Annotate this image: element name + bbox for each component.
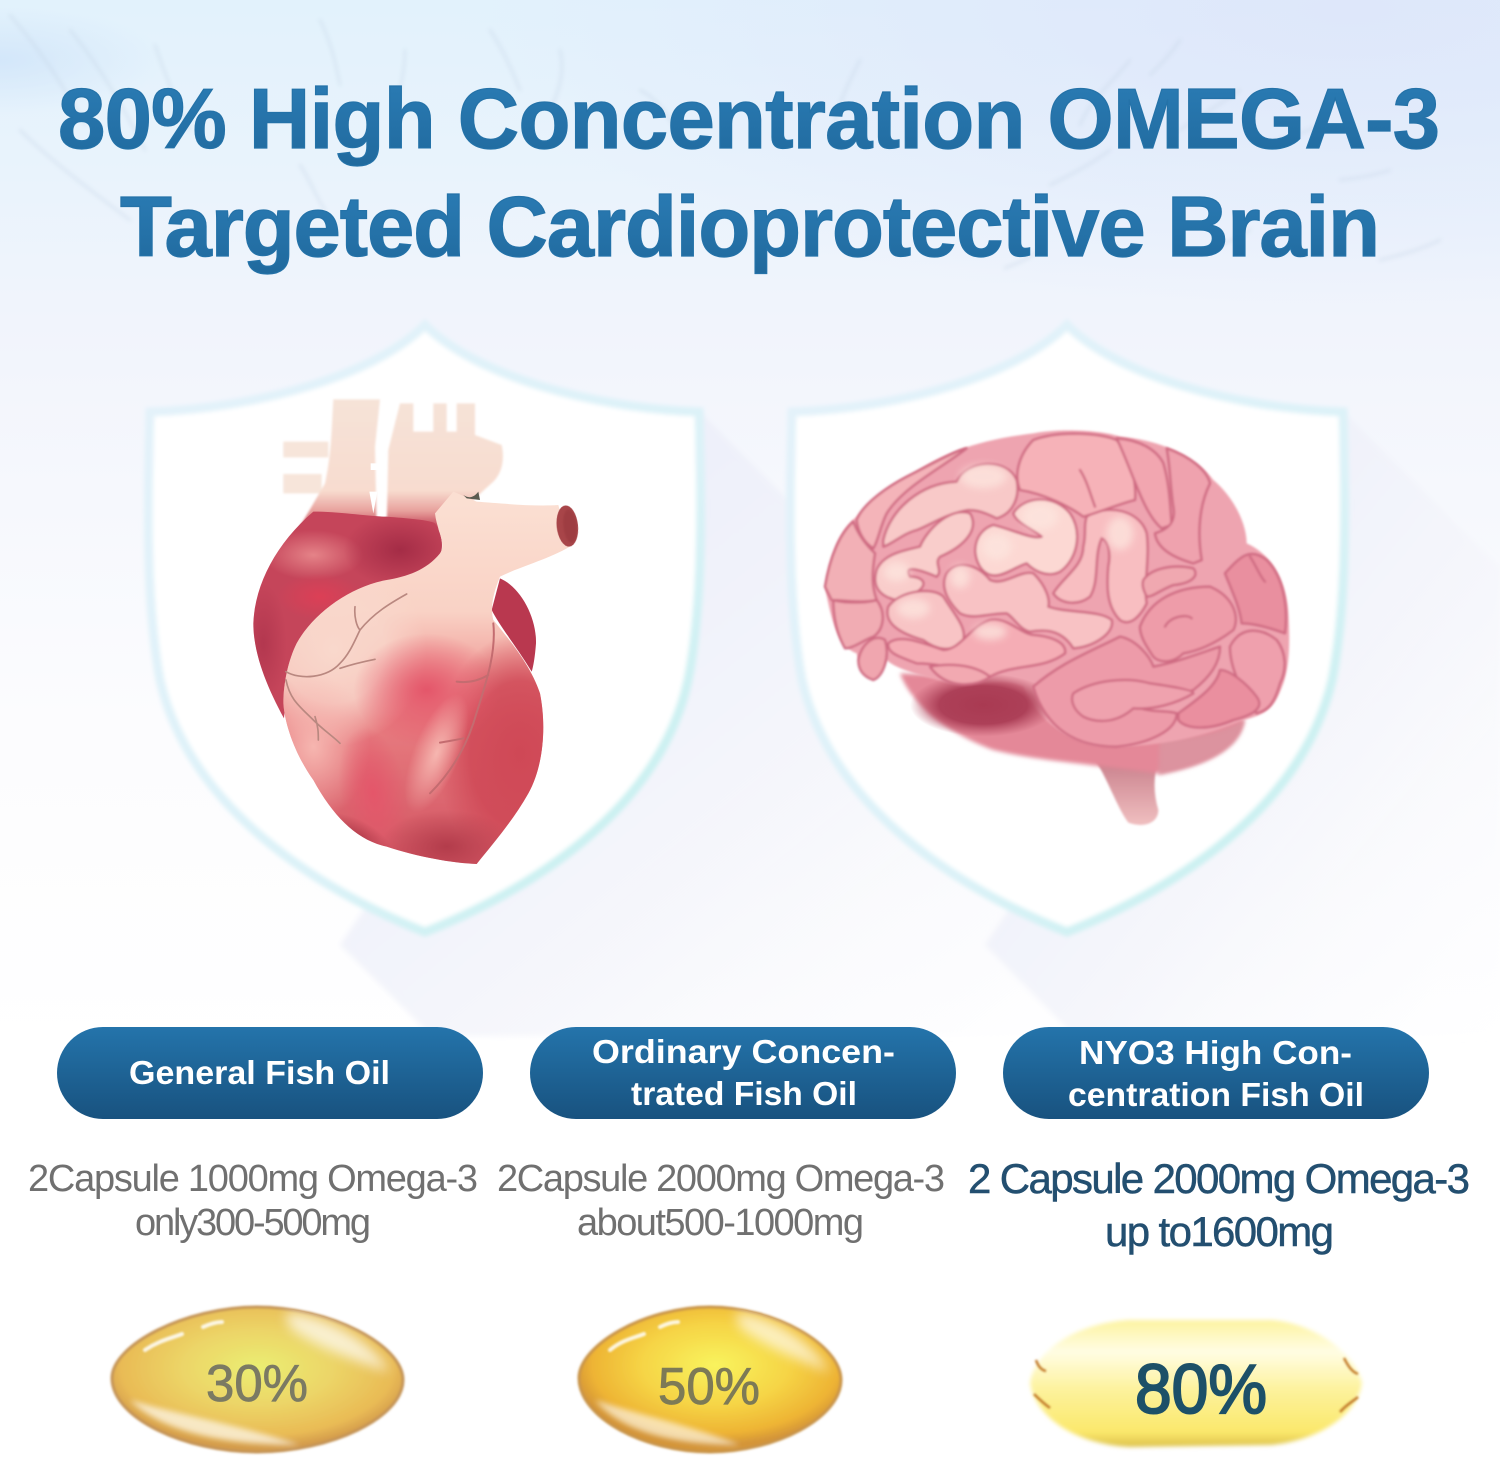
brain folds [825, 434, 1286, 747]
pill: ordinary concentrated fish oil: trated Fish Oil [631, 1075, 857, 1112]
text: NYO3 fish oil dose: up to1600mg [1105, 1208, 1334, 1255]
capsule: 80%: 80% [1135, 1350, 1267, 1428]
coronary vessels [286, 594, 494, 793]
title: 80% High Concentration OMEGA-3 [58, 72, 1440, 167]
text: NYO3 fish oil dose [968, 1155, 1470, 1255]
pill: ordinary concentrated fish oil [530, 1027, 956, 1119]
pill: NYO3 high concentration fish oil [1003, 1027, 1429, 1119]
capsule: 50%: 50% [658, 1358, 760, 1416]
text: general fish oil dose [28, 1158, 478, 1244]
text: general fish oil dose: 2Capsule 1000mg Omega-3 [28, 1158, 478, 1200]
text: ordinary fish oil dose [497, 1158, 945, 1244]
title [58, 72, 1440, 275]
capsule: 50% [579, 1307, 841, 1452]
capsule: 30% [112, 1307, 403, 1452]
title: Targeted Cardioprotective Brain [120, 180, 1380, 275]
brain base [825, 430, 1289, 825]
text: ordinary fish oil dose: 2Capsule 2000mg Omega-3 [497, 1158, 945, 1200]
pill: ordinary concentrated fish oil: Ordinary Concen- [592, 1033, 895, 1070]
pill: general fish oil: General Fish Oil [129, 1054, 390, 1091]
icon: heart [253, 398, 578, 864]
text: ordinary fish oil dose: about500-1000mg [577, 1202, 864, 1244]
icon: brain [825, 430, 1289, 825]
pill: general fish oil [57, 1027, 483, 1119]
pill: NYO3 high concentration fish oil: centration Fish Oil [1068, 1076, 1364, 1113]
text: general fish oil dose: only300-500mg [135, 1202, 371, 1244]
text: NYO3 fish oil dose: 2 Capsule 2000mg Omega-3 [968, 1155, 1470, 1202]
panel: brain shield [790, 325, 1345, 932]
diagonal shield shadows [340, 412, 1500, 1036]
brain highlights [883, 465, 1133, 640]
capsule: 80% [1030, 1320, 1362, 1447]
pill: NYO3 high concentration fish oil: NYO3 High Con- [1079, 1034, 1352, 1071]
capsule: 30%: 30% [206, 1355, 308, 1413]
panel: heart shield [148, 325, 701, 932]
